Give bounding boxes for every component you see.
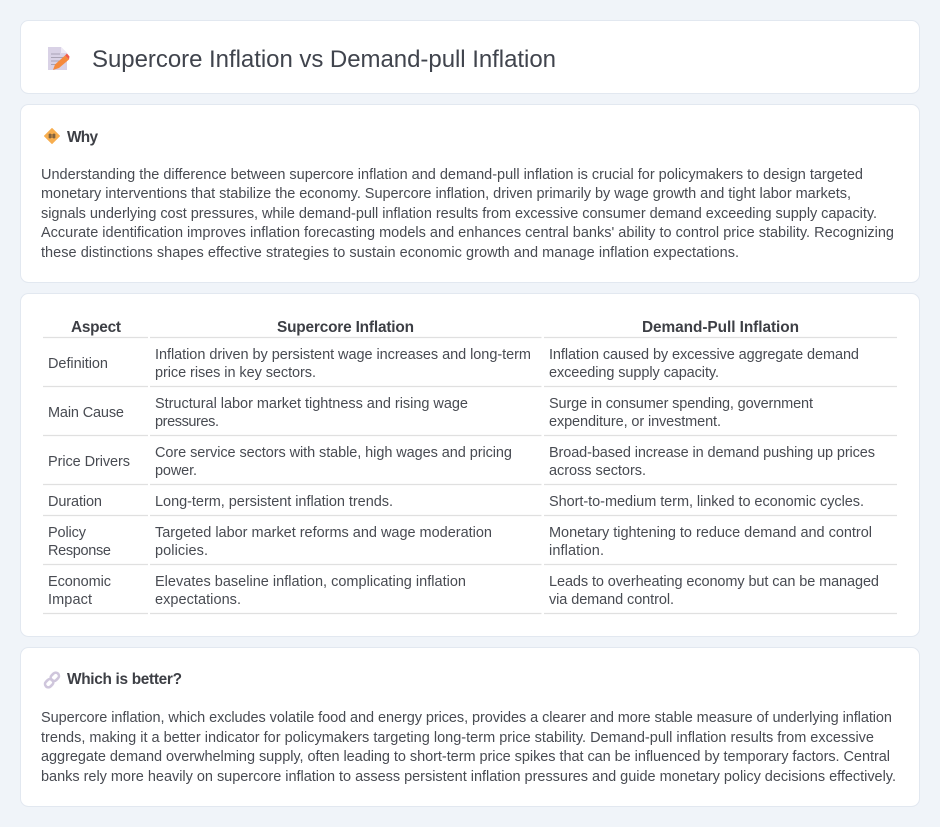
row: duration: Duration <box>48 494 102 510</box>
row: definition: Inflation caused by excessive aggregate demand <box>549 347 859 363</box>
icon: chain link <box>44 671 60 689</box>
row: policy response <box>48 525 872 559</box>
table header: Aspect <box>71 319 121 336</box>
row: definition: exceeding supply capacity. <box>549 365 719 381</box>
row: duration: Long-term, persistent inflation trends. <box>155 494 393 510</box>
row: policy response: Monetary tightening to reduce demand and control <box>549 525 872 541</box>
row: main cause: expenditure, or investment. <box>549 414 721 430</box>
icon: warning diamond <box>44 128 60 144</box>
panel: which is better <box>20 648 920 806</box>
row: economic impact: expectations. <box>155 592 241 608</box>
row: economic impact: Economic <box>48 574 111 590</box>
row: main cause: Surge in consumer spending, government <box>549 396 813 412</box>
text block: why paragraph: Understanding the difference between supercore inflation and demand-pull inflation is crucial for policymakers to design targeted <box>41 167 863 183</box>
row: price drivers: Core service sectors with stable, high wages and pricing <box>155 445 512 461</box>
icon: document with pencil <box>48 47 70 70</box>
row: policy response: Targeted labor market reforms and wage moderation <box>155 525 492 541</box>
row: main cause <box>48 396 813 430</box>
row: price drivers: Price Drivers <box>48 454 130 470</box>
row: economic impact: via demand control. <box>549 592 674 608</box>
row: policy response: Response <box>48 543 111 559</box>
row: definition: Inflation driven by persistent wage increases and long-term <box>155 347 531 363</box>
text block: which is better paragraph: aggregate demand overwhelming supply, often leading to short-term price spikes that can be influenced by temporary factors. Central <box>41 749 890 765</box>
table header <box>71 319 799 336</box>
title: Supercore Inflation vs Demand-pull Inflation <box>92 46 556 73</box>
table header: Demand-Pull Inflation <box>642 319 799 336</box>
row: policy response: inflation. <box>549 543 604 559</box>
text block: why paragraph <box>41 167 894 261</box>
text block: which is better paragraph: trends, making it a better indicator for policymakers targeting long-term price stability. Demand-pull inflation results from excessive <box>41 730 874 746</box>
row: duration <box>48 494 864 510</box>
row: main cause: Main Cause <box>48 405 124 421</box>
row: main cause: Structural labor market tightness and rising wage <box>155 396 468 412</box>
row: economic impact: Impact <box>48 592 92 608</box>
panel: title header <box>20 20 920 94</box>
row: economic impact: Elevates baseline inflation, complicating inflation <box>155 574 466 590</box>
text block: why paragraph: monetary interventions that stabilize the economy. Supercore inflation, driven primarily by wage growth and tight labor markets, <box>41 186 851 202</box>
row: policy response: policies. <box>155 543 208 559</box>
row: price drivers: across sectors. <box>549 463 646 479</box>
row: economic impact <box>48 574 879 608</box>
text block: why paragraph: signals underlying cost pressures, while demand-pull inflation results from excessive consumer demand exceeding supply capacity. <box>41 206 877 222</box>
heading: why: Why <box>67 129 98 146</box>
row: economic impact: Leads to overheating economy but can be managed <box>549 574 879 590</box>
text block: which is better paragraph: banks rely more heavily on supercore inflation to assess persistent inflation pressures and guide monetary policy decisions effectively. <box>41 769 896 785</box>
text block: which is better paragraph <box>41 710 896 785</box>
panel: comparison table <box>20 294 920 636</box>
row: policy response: Policy <box>48 525 87 541</box>
text block: why paragraph: these distinctions shapes effective strategies to sustain economic growth and manage inflation expectations. <box>41 245 739 261</box>
heading: which is better: Which is better? <box>67 671 182 688</box>
row: price drivers: power. <box>155 463 197 479</box>
row: duration: Short-to-medium term, linked to economic cycles. <box>549 494 864 510</box>
row: price drivers <box>48 445 875 479</box>
row: main cause: pressures. <box>155 414 219 430</box>
row: price drivers: Broad-based increase in demand pushing up prices <box>549 445 875 461</box>
table header: Supercore Inflation <box>277 319 414 336</box>
text block: why paragraph: Accurate identification improves inflation forecasting models and enhances central banks' ability to control price stability. Recognizing <box>41 225 894 241</box>
text block: which is better paragraph: Supercore inflation, which excludes volatile food and energy prices, provides a clearer and more stable measure of underlying inflation <box>41 710 892 726</box>
row: definition: Definition <box>48 356 108 372</box>
row: definition: price rises in key sectors. <box>155 365 316 381</box>
row: definition <box>48 347 859 381</box>
panel: why <box>20 104 920 282</box>
